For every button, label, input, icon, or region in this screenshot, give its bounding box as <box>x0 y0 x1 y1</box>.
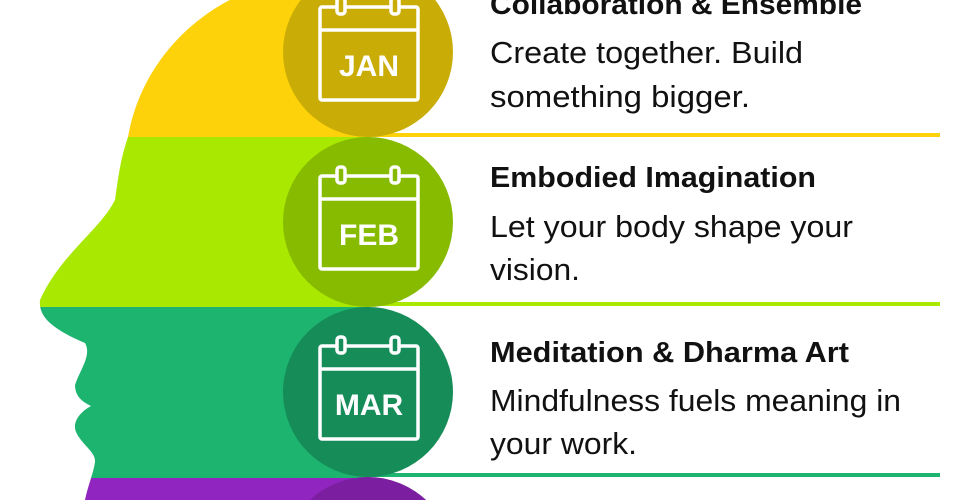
icon: calendar FEB <box>320 167 418 269</box>
circle: FEB <box>283 137 453 307</box>
text block: Meditation <box>490 337 901 461</box>
circle: JAN <box>283 0 453 137</box>
text block: Collaboration: something bigger. <box>490 79 750 114</box>
text block: Meditation: your work. <box>490 426 637 461</box>
text block: Meditation: Meditation & Dharma Art <box>490 337 849 369</box>
icon: calendar FEB: FEB <box>339 219 399 252</box>
icon: calendar JAN <box>320 0 418 100</box>
text block: Embodied: Let your body shape your <box>490 209 853 244</box>
circle: MAR <box>283 307 453 477</box>
text block: Meditation: Mindfulness fuels meaning in <box>490 383 901 418</box>
text block: Embodied: vision. <box>490 252 580 287</box>
icon: calendar JAN: JAN <box>339 50 399 83</box>
head silhouette <box>40 0 368 500</box>
text block: Embodied: Embodied Imagination <box>490 162 816 194</box>
divider lines <box>368 133 940 477</box>
icon: calendar MAR: MAR <box>335 389 403 422</box>
text block: Embodied <box>490 162 853 287</box>
circle: APR (partial) <box>310 477 426 500</box>
text block: Collaboration <box>490 0 862 114</box>
text block: Collaboration: Create together. Build <box>490 35 803 70</box>
icon: calendar MAR <box>320 337 418 439</box>
